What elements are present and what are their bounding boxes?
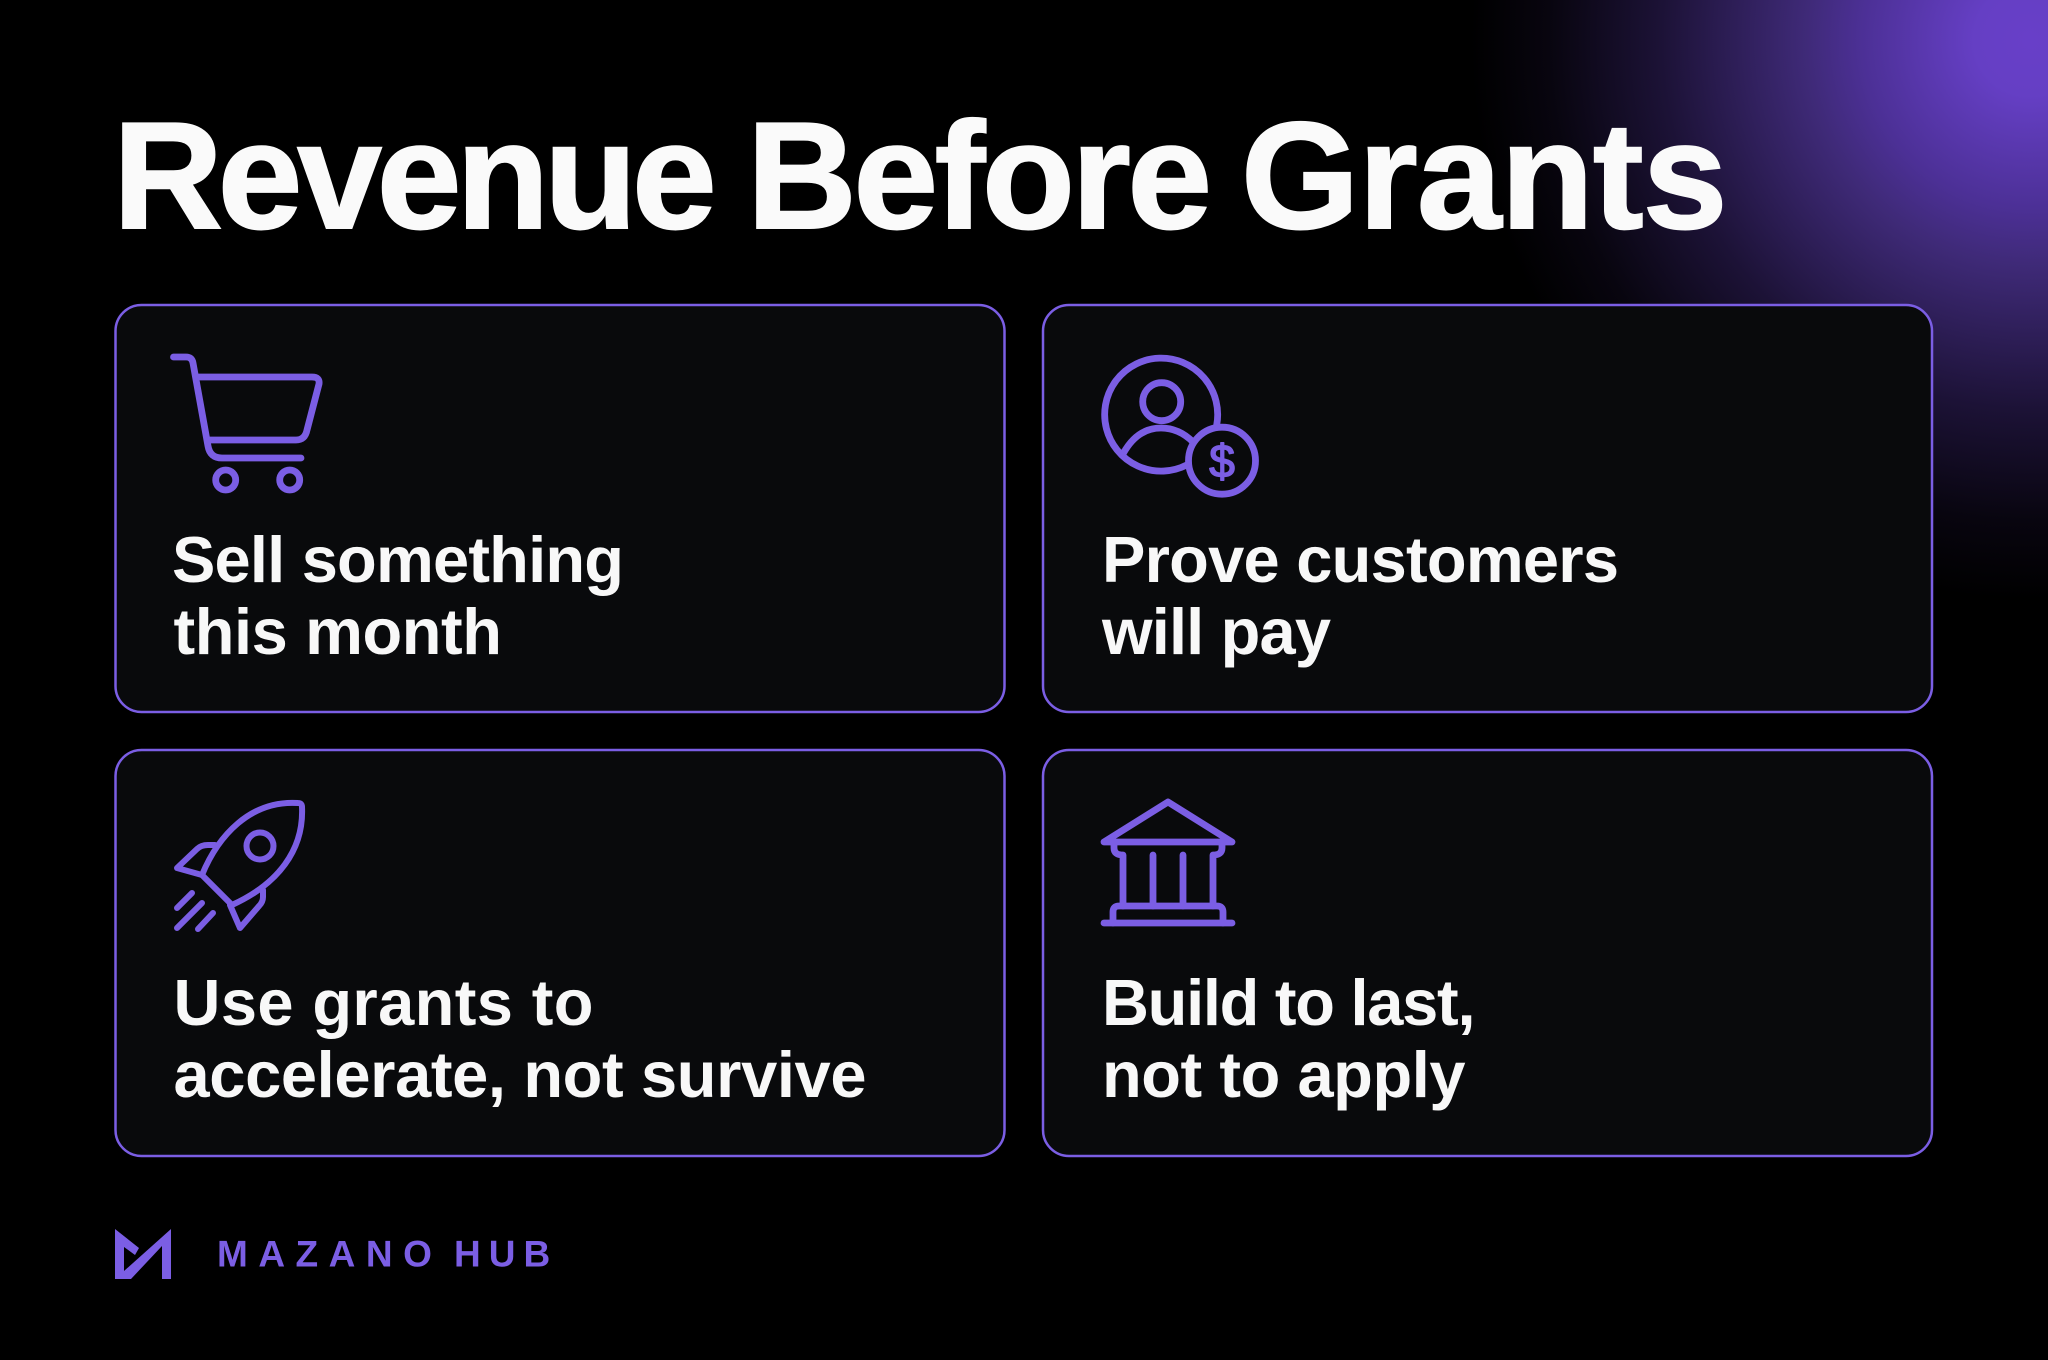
icon: logo mark: [115, 1229, 171, 1279]
panel: build to last: [1043, 750, 1932, 1156]
card text: [1102, 966, 1476, 1111]
card text: Use grants to: [174, 966, 594, 1039]
card text: Prove customers: [1102, 523, 1619, 596]
card text: Build to last,: [1102, 966, 1476, 1039]
brand name: HUB: [454, 1234, 558, 1274]
icon: customer with dollar coin: $: [1209, 435, 1235, 487]
icon: shopping cart: [174, 357, 319, 490]
footer brand: [115, 1229, 558, 1279]
corner glow: [1400, 0, 2048, 660]
card text: will pay: [1101, 595, 1331, 668]
brand name: MAZANO: [217, 1234, 442, 1274]
icon: bank building: [1104, 802, 1232, 923]
panel: prove customers: [1043, 305, 1932, 712]
title: Grants: [1241, 91, 1727, 261]
card text: [1101, 523, 1619, 668]
card text: this month: [174, 595, 502, 668]
panel: sell something: [116, 305, 1004, 712]
icon: rocket: [177, 803, 302, 929]
title: Before: [747, 91, 1209, 261]
panel: use grants: [116, 750, 1004, 1156]
title: Revenue: [113, 91, 712, 261]
icon: customer with dollar coin: [1105, 358, 1256, 494]
card text: accelerate, not survive: [174, 1038, 866, 1111]
card text: [172, 523, 624, 668]
card text: not to apply: [1102, 1038, 1466, 1111]
card text: [174, 966, 866, 1111]
card text: Sell something: [172, 523, 624, 596]
